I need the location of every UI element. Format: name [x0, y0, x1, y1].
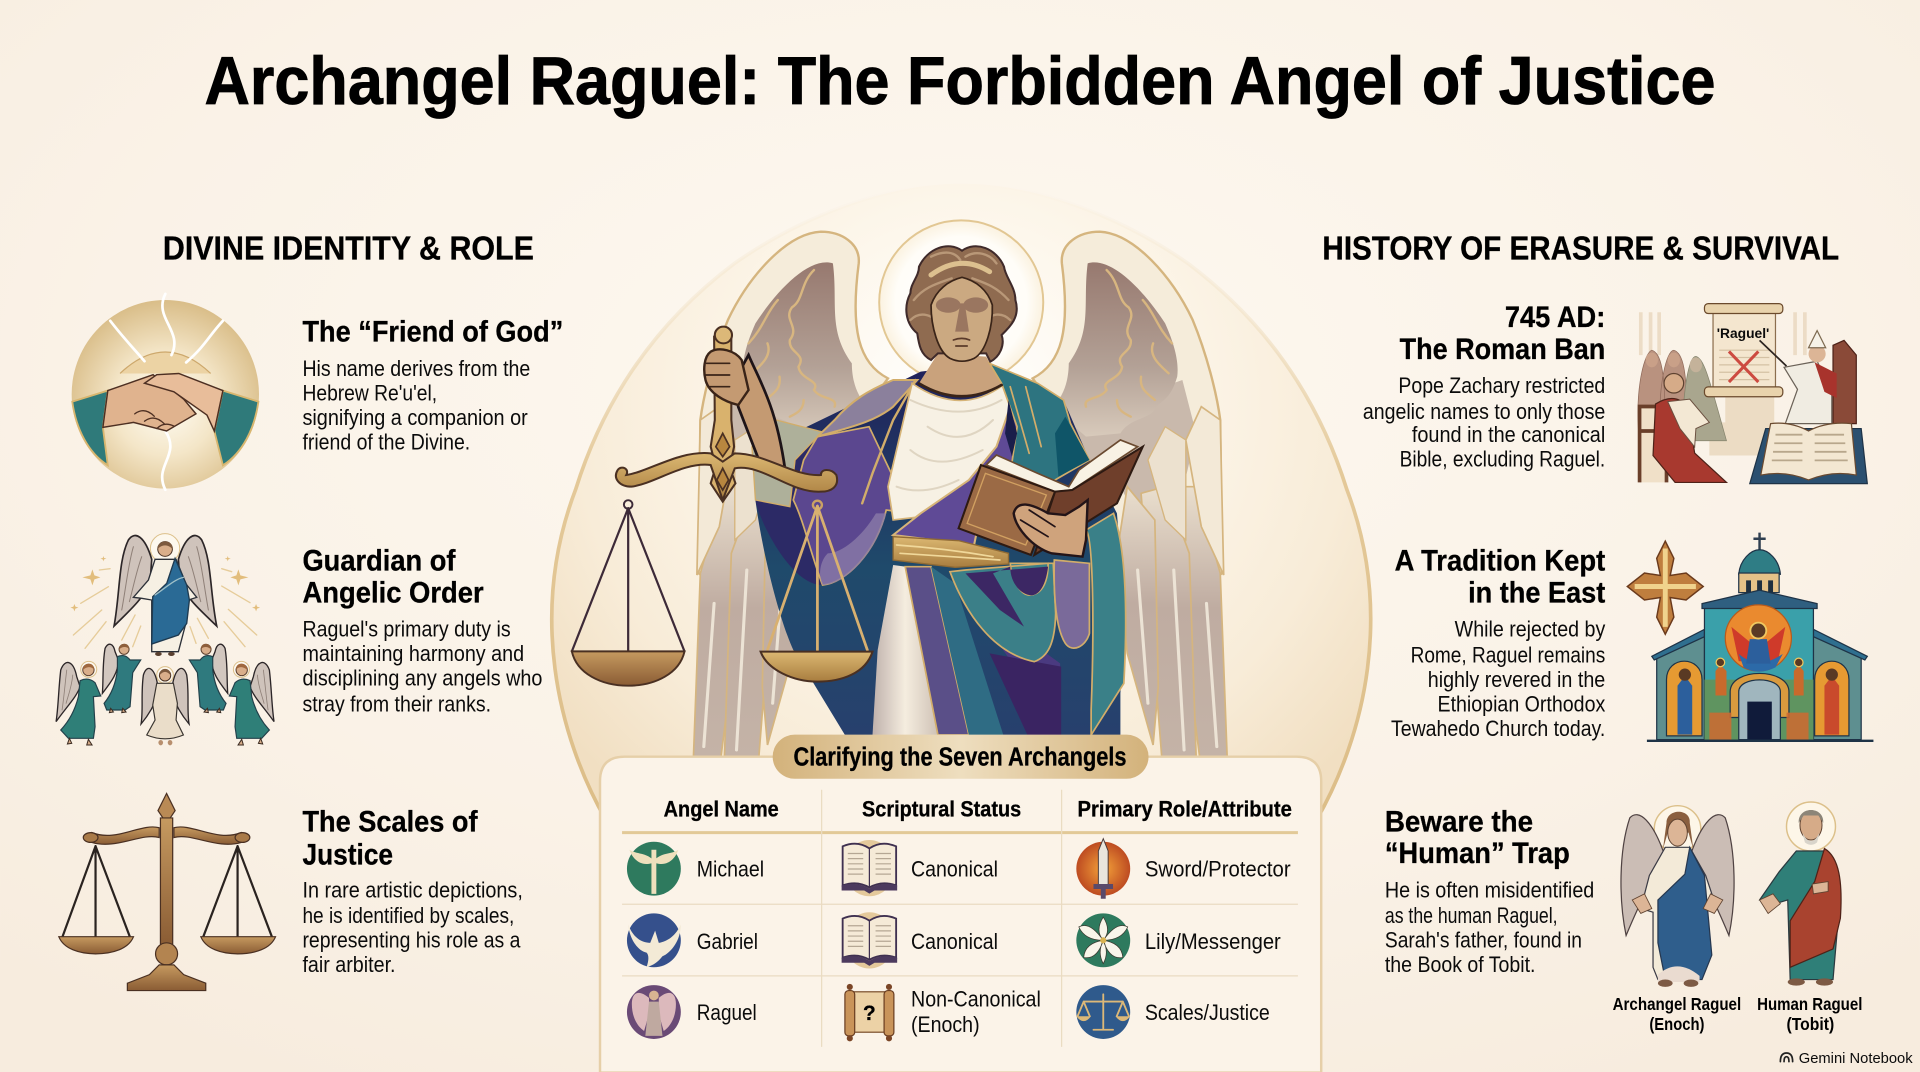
- icon: archangel raguel figure: [1621, 806, 1734, 987]
- text block: friend of god: signifying a companion or: [302, 405, 528, 430]
- halo: [879, 220, 1043, 384]
- text block: roman ban: The Roman Ban: [1400, 333, 1605, 366]
- text block: east tradition: in the East: [1468, 576, 1605, 609]
- figure captions: (Enoch): [1649, 1014, 1705, 1034]
- illustration: archangel raguel: [572, 220, 1227, 757]
- row: gabriel: Gabriel: [697, 929, 758, 954]
- panel: seven archangels table: [600, 735, 1321, 1072]
- icon: scales of justice: [59, 793, 276, 991]
- text block: east tradition: Tewahedo Church today.: [1391, 716, 1605, 741]
- column headers: Primary Role/Attribute: [1078, 797, 1292, 822]
- text block: guardian: [302, 545, 542, 716]
- text block: roman ban: [1363, 301, 1605, 472]
- central arch backdrop: [552, 184, 1371, 820]
- row: michael: Sword/Protector: [1145, 857, 1291, 882]
- figure captions: (Tobit): [1786, 1014, 1834, 1034]
- head: [906, 246, 1017, 362]
- text block: friend of god: friend of the Divine.: [302, 429, 470, 454]
- scales staff, arm and beam: [616, 327, 872, 682]
- text block: guardian: maintaining harmony and: [302, 641, 524, 666]
- left wing: [693, 232, 888, 757]
- text block: east tradition: Ethiopian Orthodox: [1438, 691, 1605, 716]
- icon: handshake: [72, 294, 259, 490]
- column headers: Scriptural Status: [862, 797, 1021, 822]
- icon: ornate cross: [1627, 541, 1703, 634]
- row: raguel: ?: [863, 1002, 876, 1025]
- text block: human trap: “Human” Trap: [1385, 837, 1570, 870]
- watermark: gemini notebook: Gemini Notebook: [1799, 1051, 1913, 1067]
- text block: guardian: Angelic Order: [302, 576, 484, 609]
- right wing: [1033, 232, 1227, 757]
- text block: east tradition: Rome, Raguel remains: [1411, 642, 1605, 667]
- text block: guardian: stray from their ranks.: [302, 691, 491, 716]
- neck: [919, 353, 1002, 397]
- text block: human trap: Sarah's father, found in: [1385, 928, 1582, 953]
- text block: east tradition: [1391, 545, 1605, 741]
- figure captions: [1613, 994, 1862, 1034]
- icon: council scene with scroll: 'Raguel': [1717, 325, 1769, 341]
- icon: council scene with scroll: [1638, 304, 1867, 484]
- text block: scales: he is identified by scales,: [302, 903, 514, 928]
- row: raguel: (Enoch): [911, 1012, 980, 1037]
- table grid: [622, 831, 1298, 834]
- icon: ethiopian church: [1647, 533, 1873, 741]
- text block: scales: Justice: [302, 838, 393, 871]
- row: raguel: Raguel: [697, 1000, 757, 1025]
- text block: guardian: Guardian of: [302, 545, 456, 578]
- column headers: [664, 797, 1292, 822]
- text block: friend of god: The “Friend of God”: [302, 316, 563, 349]
- heading: divine identity: DIVINE IDENTITY & ROLE: [163, 231, 534, 268]
- text block: guardian: Raguel's primary duty is: [302, 617, 511, 642]
- table heading pill: Clarifying the Seven Archangels: [793, 743, 1127, 771]
- icon: angels in order: [56, 534, 274, 745]
- row: gabriel: [627, 912, 1281, 969]
- title: Archangel Raguel: The Forbidden Angel of Justice: [205, 44, 1715, 119]
- belt: [893, 537, 1009, 567]
- figure drawn in local coordinates: [616, 232, 1227, 757]
- text block: human trap: the Book of Tobit.: [1385, 952, 1535, 977]
- text block: scales: In rare artistic depictions,: [302, 878, 523, 903]
- text block: human trap: [1385, 805, 1594, 977]
- column headers: Angel Name: [664, 797, 779, 822]
- row: raguel: Non-Canonical: [911, 986, 1041, 1011]
- text block: roman ban: angelic names to only those: [1363, 399, 1605, 424]
- robe: [752, 363, 1126, 735]
- figure captions: Human Raguel: [1757, 994, 1862, 1014]
- text block: friend of god: Hebrew Re'u'el,: [302, 380, 437, 405]
- text block: scales: representing his role as a: [302, 928, 521, 953]
- text block: guardian: disciplining any angels who: [302, 666, 542, 691]
- text block: human trap: Beware the: [1385, 805, 1533, 838]
- table heading pill: [773, 735, 1149, 779]
- left scale pan and chains: [572, 500, 685, 686]
- text block: scales: [302, 805, 523, 977]
- figure captions: Archangel Raguel: [1613, 994, 1741, 1014]
- text block: scales: The Scales of: [302, 805, 478, 838]
- open book: [959, 440, 1143, 557]
- row: raguel: Scales/Justice: [1145, 1000, 1270, 1025]
- text block: human trap: He is often misidentified: [1385, 878, 1594, 903]
- text block: east tradition: While rejected by: [1455, 617, 1605, 642]
- row: raguel: [627, 984, 1270, 1041]
- text block: friend of god: His name derives from the: [302, 356, 530, 381]
- icon: human raguel figure: [1760, 802, 1841, 986]
- text block: east tradition: A Tradition Kept: [1395, 545, 1605, 578]
- heading: history: HISTORY OF ERASURE & SURVIVAL: [1322, 231, 1839, 268]
- row: gabriel: Lily/Messenger: [1145, 929, 1281, 954]
- text block: friend of god: [302, 316, 563, 454]
- tunic: [888, 363, 1089, 545]
- text block: east tradition: highly revered in the: [1428, 667, 1605, 692]
- text block: roman ban: Bible, excluding Raguel.: [1400, 447, 1605, 472]
- panel: divine identity and role: [56, 231, 563, 991]
- row: michael: Michael: [697, 857, 764, 882]
- text block: human trap: as the human Raguel,: [1385, 903, 1558, 928]
- row: michael: [627, 839, 1291, 899]
- table card: [600, 757, 1321, 1072]
- text block: roman ban: Pope Zachary restricted: [1398, 373, 1605, 398]
- text block: roman ban: 745 AD:: [1505, 301, 1605, 334]
- row: michael: Canonical: [911, 857, 998, 882]
- text block: roman ban: found in the canonical: [1412, 422, 1605, 447]
- row: gabriel: Canonical: [911, 929, 998, 954]
- panel: history of erasure and survival: [1322, 231, 1873, 1034]
- text block: scales: fair arbiter.: [302, 952, 396, 977]
